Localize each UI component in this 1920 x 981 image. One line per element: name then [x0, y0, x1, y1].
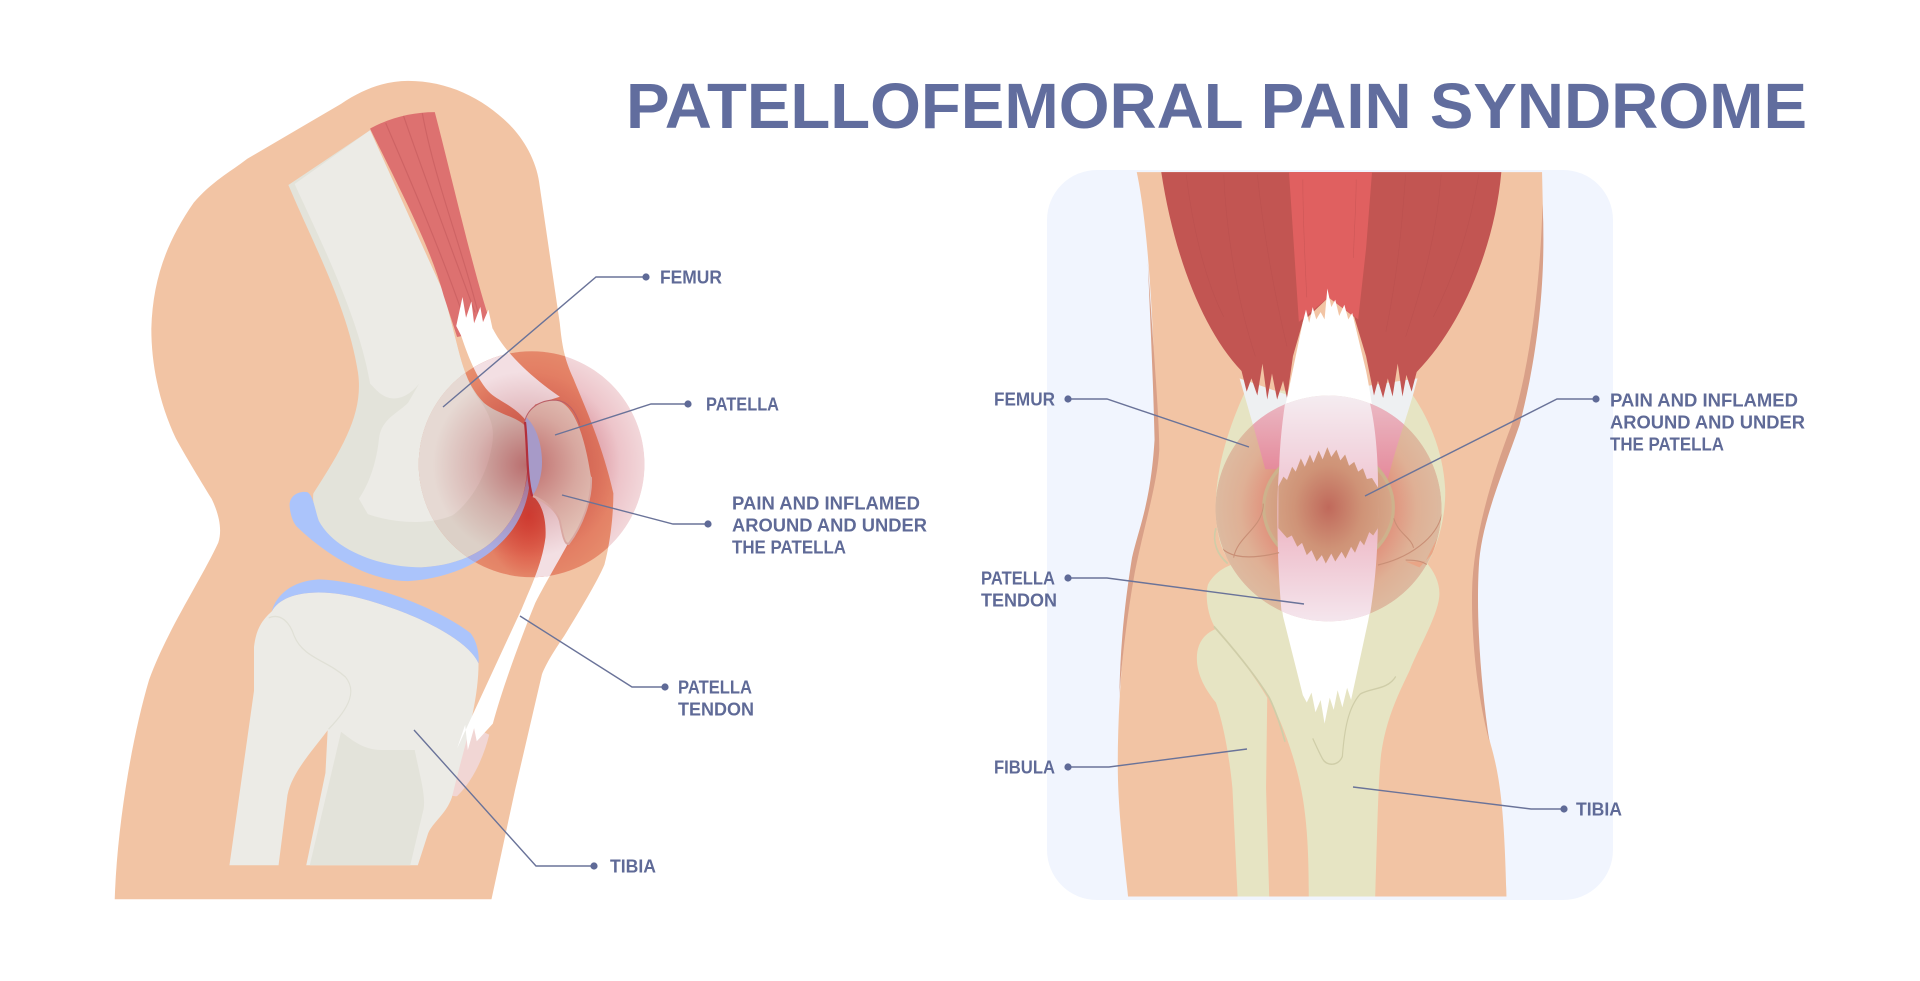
front view panel background [1047, 170, 1613, 900]
leg skin [1118, 172, 1543, 896]
central tendon [1277, 288, 1378, 724]
label: patella: PATELLA [706, 394, 779, 414]
label: femur [994, 390, 1249, 447]
fibula [1197, 629, 1269, 896]
blue tissue under patella [525, 417, 542, 496]
label: pain and inflamed: THE PATELLA [1610, 434, 1724, 454]
pain area: side view [418, 351, 644, 578]
label: femur [443, 268, 722, 407]
label: pain and inflamed [1365, 390, 1805, 496]
side tendons pain tint [1253, 403, 1288, 470]
patella [1262, 466, 1395, 550]
label: pain and inflamed: THE PATELLA [732, 538, 846, 558]
label: patella tendon: PATELLA [678, 678, 752, 698]
label: tibia: TIBIA [1576, 800, 1622, 820]
quadriceps muscle side [370, 112, 493, 337]
patella zigzag center [1278, 447, 1379, 564]
front view knee illustration [1118, 172, 1543, 896]
side tendons [1240, 378, 1417, 479]
femoral condyle contours [1216, 504, 1442, 567]
leaders and labels: front view [981, 390, 1805, 820]
label: tibia [1353, 787, 1622, 820]
tendon pain tint [1277, 391, 1378, 626]
tibia and fibula bone [229, 592, 479, 865]
label: tibia: TIBIA [610, 856, 656, 876]
tendon insertion [436, 721, 489, 796]
tibia [1207, 562, 1439, 896]
bone contour lines [1214, 626, 1396, 764]
label: pain and inflamed: PAIN AND INFLAMED [732, 494, 920, 514]
label: patella tendon [520, 616, 754, 720]
lower right skin tint [1406, 538, 1437, 567]
quadriceps muscle [1161, 172, 1501, 399]
label: patella tendon: PATELLA [981, 568, 1055, 588]
upper tendon [456, 297, 560, 419]
label: femur: FEMUR [660, 268, 722, 288]
label: tibia [414, 730, 656, 876]
label: pain and inflamed: AROUND AND UNDER [732, 516, 927, 536]
label: pain and inflamed [562, 494, 927, 558]
patella outline [524, 400, 580, 425]
label: patella tendon: TENDON [678, 700, 754, 720]
label: fibula: FIBULA [994, 758, 1055, 778]
leg skin silhouette [115, 81, 613, 899]
label: pain and inflamed: PAIN AND INFLAMED [1610, 390, 1798, 410]
femur bone [288, 130, 528, 567]
patella [524, 400, 591, 544]
pain area: front view [1215, 378, 1442, 626]
label: patella tendon [981, 568, 1304, 610]
skin shadow left [1119, 263, 1159, 696]
femoral cartilage [290, 458, 530, 581]
label: fibula [994, 749, 1247, 778]
label: patella tendon: TENDON [981, 590, 1057, 610]
title: PATELLOFEMORAL PAIN SYNDROME [626, 70, 1807, 142]
skin shadow right [1472, 204, 1543, 742]
leaders and labels: side view [414, 268, 927, 876]
femur [1216, 391, 1445, 567]
side view knee illustration [115, 81, 645, 899]
label: patella [555, 394, 779, 435]
lower patellar tendon [457, 496, 568, 750]
tibial cartilage [272, 579, 479, 663]
label: pain and inflamed: AROUND AND UNDER [1610, 412, 1805, 432]
label: femur: FEMUR [994, 390, 1055, 410]
